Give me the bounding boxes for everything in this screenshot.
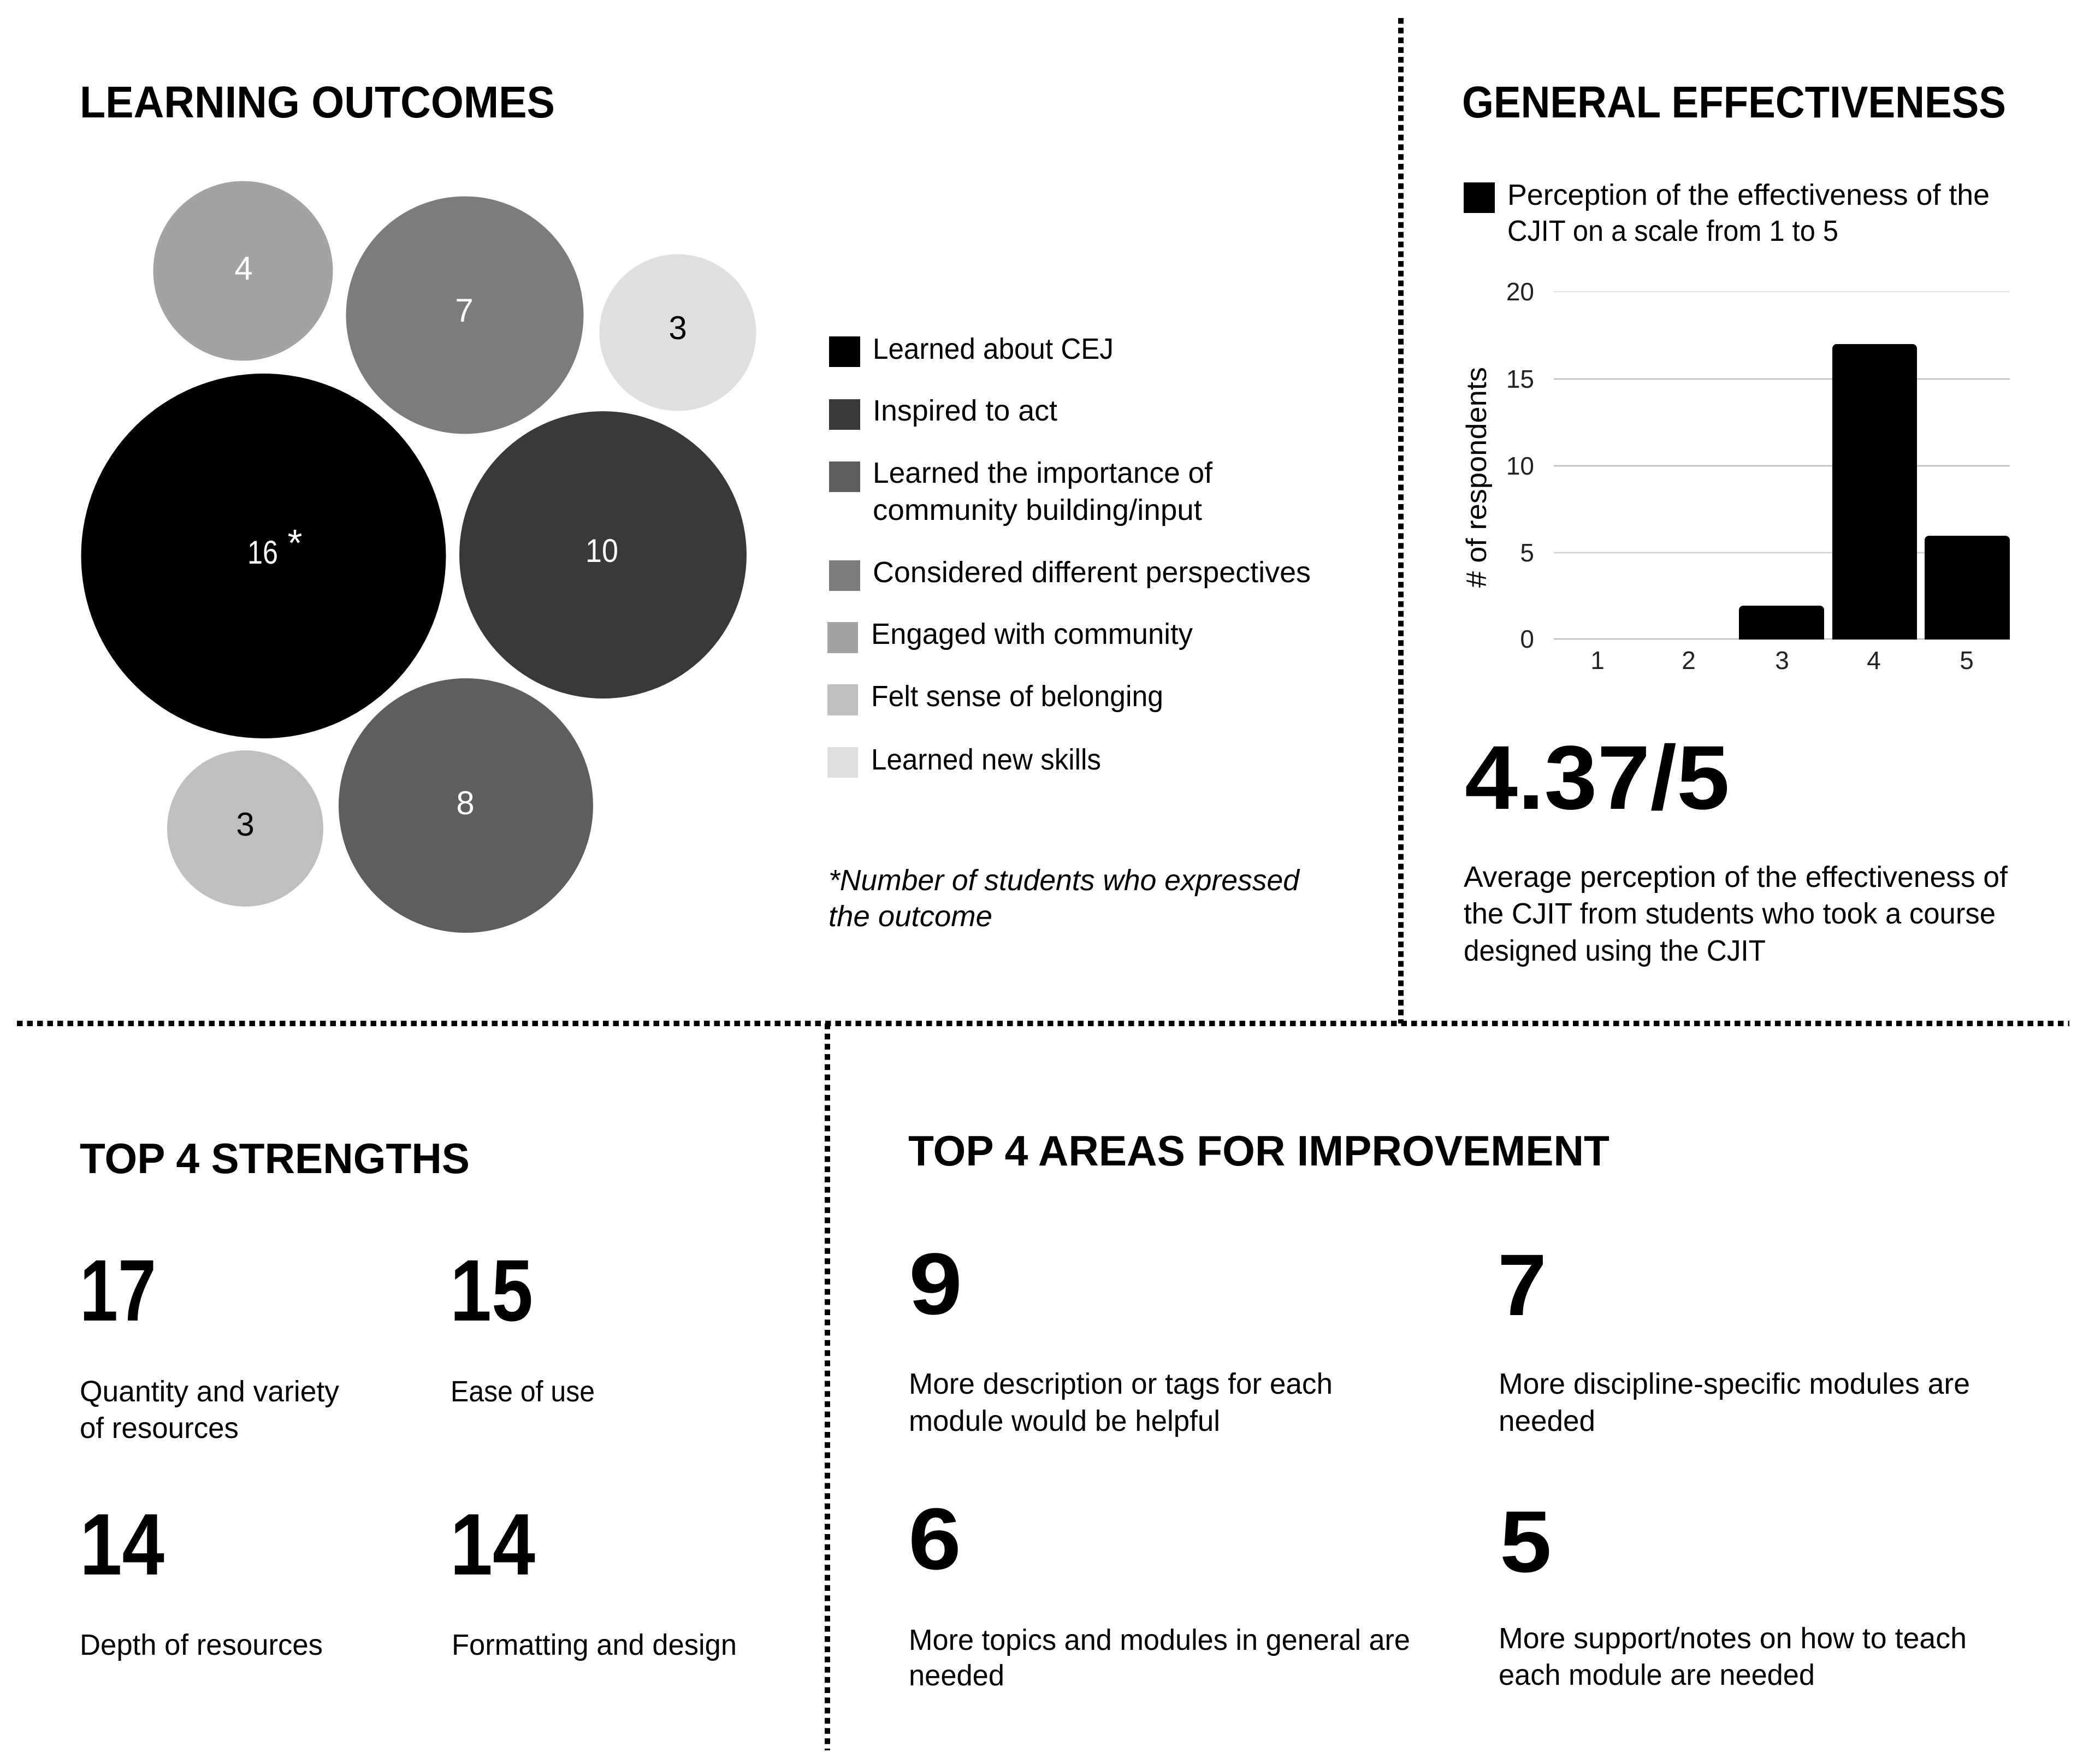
stat: 14 formatting: 14 xyxy=(450,1495,535,1593)
heading: areas for improvement: TOP 4 AREAS FOR IMPROVEMENT xyxy=(908,1127,1609,1175)
chart legend: Perception of the effectiveness of the xyxy=(1507,179,1990,211)
stat: 14 depth xyxy=(80,1495,323,1661)
panel: top 4 strengths xyxy=(80,1134,737,1661)
footnote: the outcome xyxy=(829,900,992,933)
stat: 6: 6 xyxy=(908,1490,961,1588)
bubble: community building 8: 8 xyxy=(456,785,475,821)
stat description xyxy=(1464,861,2008,967)
stat: 15: 15 xyxy=(450,1241,533,1339)
stat: 7 xyxy=(1498,1236,1970,1437)
y axis labels: 0 xyxy=(1520,625,1534,653)
x axis labels: 2 xyxy=(1682,646,1696,674)
legend item: learned about CEJ: Learned about CEJ xyxy=(873,333,1114,365)
bubble: felt sense of belonging 3: 3 xyxy=(236,806,255,843)
bubble: engaged with community 4: 4 xyxy=(234,250,253,287)
y axis title: # of respondents xyxy=(1461,367,1493,588)
stat: 17: 17 xyxy=(80,1241,156,1339)
stat: 15: Ease of use xyxy=(451,1375,595,1408)
legend item: community building xyxy=(829,457,1213,526)
bubble: learned about CEJ 16: 16 xyxy=(247,534,278,571)
stat: 7: 7 xyxy=(1498,1236,1547,1334)
legend item: sense of belonging: Felt sense of belonging xyxy=(871,680,1163,713)
stat: 17 xyxy=(80,1241,339,1445)
stat: 9: More description or tags for each xyxy=(909,1368,1333,1400)
stat: 17: of resources xyxy=(80,1412,239,1445)
bubble: engaged with community 4 xyxy=(153,181,333,360)
bar: rating 3 xyxy=(1739,606,1824,640)
stat description: designed using the CJIT xyxy=(1464,934,1766,967)
legend item: engaged with community: Engaged with community xyxy=(871,618,1193,650)
stat: 5: More support/notes on how to teach xyxy=(1499,1622,1967,1655)
legend: outcomes xyxy=(827,333,1311,778)
bar: rating 5 xyxy=(1925,536,2010,640)
y axis labels: 15 xyxy=(1506,365,1534,393)
bubble: felt sense of belonging 3 xyxy=(167,750,323,907)
stat: 9 xyxy=(909,1235,1333,1437)
x axis labels: 5 xyxy=(1960,646,1974,674)
legend item: community building: Learned the importance of xyxy=(873,457,1213,489)
bubble: inspired to act 10: 10 xyxy=(585,532,618,569)
bubble: considered different perspectives 7: 7 xyxy=(455,292,474,329)
y axis labels: 20 xyxy=(1506,277,1534,306)
stat: 6: needed xyxy=(909,1659,1004,1692)
bubble: learned about CEJ 16 xyxy=(81,374,446,738)
stat: 7: More discipline-specific modules are xyxy=(1499,1368,1970,1400)
heading: general effectiveness: GENERAL EFFECTIVENESS xyxy=(1462,78,2006,127)
stat: 17: Quantity and variety xyxy=(80,1375,339,1408)
stat: 5: each module are needed xyxy=(1499,1659,1815,1691)
bubble: learned new skills 3: 3 xyxy=(668,310,687,346)
bubble: community building 8 xyxy=(339,678,593,933)
chart legend: CJIT on a scale from 1 to 5 xyxy=(1507,215,1838,247)
panel: learning outcomes xyxy=(80,78,1311,933)
stat description: the CJIT from students who took a course xyxy=(1464,897,1996,930)
panel: top 4 areas for improvement xyxy=(908,1127,1970,1692)
stat: 9: 9 xyxy=(909,1235,962,1333)
legend item: inspired to act: Inspired to act xyxy=(873,394,1057,427)
legend item: community building: community building/input xyxy=(873,494,1202,526)
stat: 6: More topics and modules in general are xyxy=(909,1624,1410,1656)
stat: 14 depth: Depth of resources xyxy=(80,1629,323,1661)
stat: 14 formatting xyxy=(450,1495,737,1661)
chart legend xyxy=(1464,179,1990,247)
footnote: *Number of students who expressed xyxy=(829,864,1300,897)
bubble: inspired to act 10 xyxy=(459,411,747,699)
bar: rating 4 xyxy=(1832,344,1917,640)
x axis labels xyxy=(1590,646,1974,674)
footnote xyxy=(829,864,1300,933)
bubble chart: outcomes xyxy=(81,181,756,933)
x axis labels: 1 xyxy=(1590,646,1605,674)
stat: 14 formatting: Formatting and design xyxy=(452,1629,737,1661)
stat: 5: 5 xyxy=(1500,1493,1552,1590)
panel: general effectiveness xyxy=(1461,78,2010,967)
y axis labels: 5 xyxy=(1520,538,1534,567)
stat: 9: module would be helpful xyxy=(909,1405,1220,1437)
y axis labels xyxy=(1506,277,1534,653)
bubble: learned about CEJ 16: * xyxy=(287,522,303,564)
heading: learning outcomes: LEARNING OUTCOMES xyxy=(80,78,555,127)
legend item: different perspectives: Considered different perspectives xyxy=(873,556,1311,589)
bar chart: effectiveness ratings xyxy=(1461,277,2010,674)
x axis labels: 3 xyxy=(1775,646,1789,674)
bubble: learned new skills 3 xyxy=(600,254,756,411)
stat: 14 depth: 14 xyxy=(80,1495,164,1593)
heading: top 4 strengths: TOP 4 STRENGTHS xyxy=(80,1134,470,1182)
stat: 6 xyxy=(908,1490,1410,1692)
stat: 15 xyxy=(450,1241,595,1408)
y axis labels: 10 xyxy=(1506,452,1534,480)
big stat: 4.37/5: 4.37/5 xyxy=(1465,727,1730,828)
stat description: Average perception of the effectiveness of xyxy=(1464,861,2008,893)
legend item: new skills: Learned new skills xyxy=(871,743,1101,776)
stat: 7: needed xyxy=(1499,1405,1595,1437)
bubble: considered different perspectives 7 xyxy=(346,197,583,434)
x axis labels: 4 xyxy=(1867,646,1881,674)
stat: 5 xyxy=(1499,1493,1967,1691)
